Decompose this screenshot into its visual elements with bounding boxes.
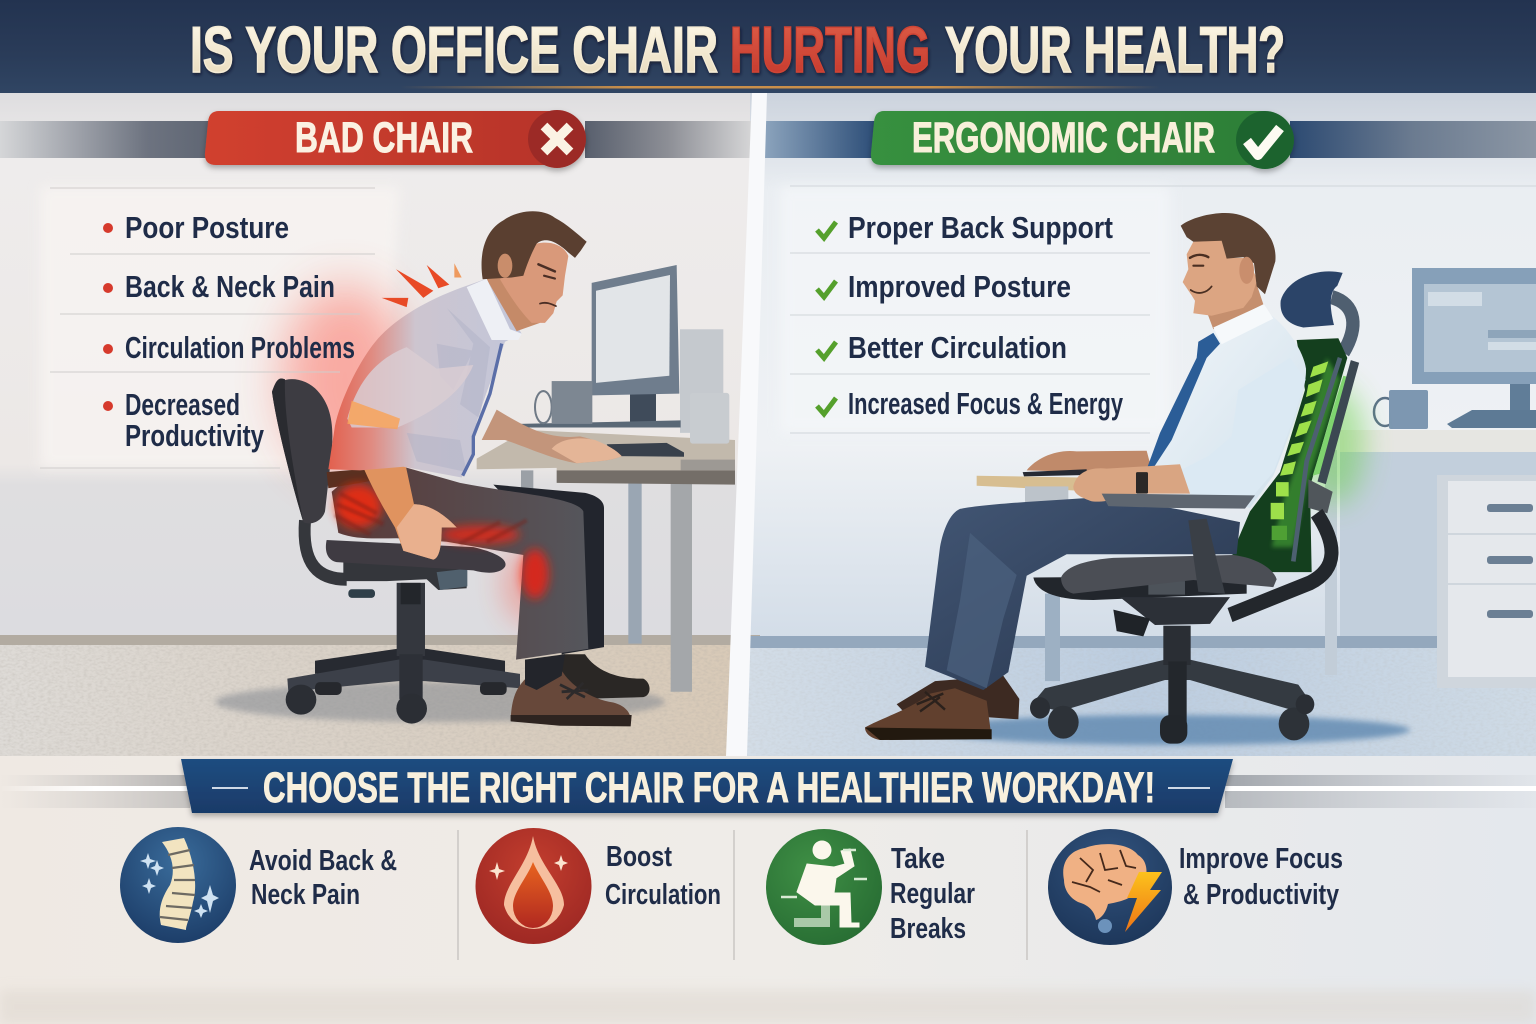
man: near leg and hips	[332, 467, 588, 660]
mug behind monitor	[535, 381, 592, 424]
icon: check mark	[1236, 111, 1294, 169]
pain marks at upper back	[382, 263, 462, 307]
tip: avoid back and neck pain	[120, 827, 397, 943]
item: increased focus and energy: Increased Focus & Energy	[848, 386, 1124, 421]
armrest post	[1188, 519, 1225, 594]
left list backing panel	[40, 186, 400, 468]
banner text: CHOOSE THE RIGHT CHAIR FOR A HEALTHIER WORKDAY!	[263, 764, 1155, 812]
armrest pad	[1102, 494, 1255, 509]
man: hair	[1181, 213, 1276, 294]
man: far arm	[1027, 451, 1153, 476]
item: decreased productivity	[103, 387, 265, 453]
desk top	[977, 476, 1080, 502]
scene: sitting badly at desk	[272, 211, 735, 726]
man: trouser shadow folds	[947, 533, 1017, 688]
tip text: Circulation	[605, 879, 721, 911]
item: better circulation: Better Circulation	[848, 330, 1067, 365]
icon: spine	[120, 827, 236, 943]
badge label: BAD CHAIR	[295, 114, 473, 162]
wristwatch	[1136, 472, 1148, 494]
ergonomic backrest with lumbar glow	[1232, 338, 1355, 572]
man: shirt placket	[463, 344, 502, 476]
man: ear	[1239, 257, 1254, 284]
divider between the panels	[726, 93, 767, 756]
sleeve cuff glow	[347, 401, 400, 429]
pain glow: hips and legs	[335, 484, 549, 599]
man: shirt	[328, 279, 522, 477]
left baseboard and carpet floor	[0, 635, 760, 756]
belt	[327, 469, 370, 488]
tip text: Regular	[890, 878, 975, 910]
man: near shoe	[865, 688, 992, 740]
icon: brain and bolt	[1048, 829, 1172, 945]
man: near sleeve	[1177, 358, 1306, 495]
item: proper back support: Proper Back Support	[848, 210, 1113, 245]
tip text: Neck Pain	[251, 879, 360, 911]
pain glow behind back and hips	[283, 285, 558, 625]
man: necktie	[1147, 333, 1220, 472]
tip text: Breaks	[890, 913, 966, 945]
tip text: Take	[891, 843, 945, 875]
keyboard mouse on desk	[1023, 469, 1087, 476]
under-desk wall shade	[1340, 452, 1536, 636]
badge label: ERGONOMIC CHAIR	[912, 114, 1215, 162]
man: face	[500, 243, 568, 323]
man: trousers	[925, 496, 1240, 690]
right desk with drawers	[1325, 430, 1536, 688]
man: collar	[467, 279, 522, 340]
man: hair	[482, 211, 587, 279]
chair seat cushion	[1061, 555, 1277, 594]
green glow behind backrest	[1305, 385, 1365, 505]
right baseboard and carpet floor	[745, 636, 1536, 756]
man: pained expression	[538, 264, 556, 306]
bottom section background	[0, 756, 1536, 1024]
tip text: Improve Focus	[1179, 843, 1343, 875]
title bar	[0, 0, 1536, 93]
chair base and wheels	[1030, 626, 1314, 744]
icon: X mark	[528, 110, 586, 168]
man: shirt	[1147, 313, 1306, 508]
title text: last part: YOUR HEALTH?	[945, 13, 1285, 86]
item: back and neck pain: Back & Neck Pain	[125, 269, 335, 304]
man: shirt sleeve	[347, 347, 473, 427]
item: circulation problems: Circulation Problems	[125, 330, 355, 365]
man: forearm and near hand	[1073, 464, 1190, 502]
background: left office wall	[0, 93, 770, 638]
left header stripe	[0, 121, 752, 158]
tip text: Avoid Back &	[249, 845, 397, 877]
office chair base	[286, 583, 520, 724]
man: collar	[1213, 304, 1273, 344]
back box on desk	[680, 329, 723, 433]
man: far shoe	[562, 654, 650, 699]
man: far shoe	[897, 676, 1019, 719]
right mug	[1374, 390, 1428, 429]
background: right office wall	[750, 93, 1536, 638]
tip text: & Productivity	[1183, 879, 1339, 911]
man: ear	[498, 254, 512, 278]
right monitor	[1412, 268, 1536, 428]
tip text: Boost	[606, 841, 672, 873]
monitor	[520, 265, 681, 427]
icon: blood drop	[476, 828, 592, 944]
man: near hand and arm	[349, 426, 457, 560]
keyboard	[607, 443, 684, 457]
title text: highlighted word: HURTING	[730, 13, 930, 86]
item: decreased productivity: Decreased	[125, 387, 240, 422]
side stripes beside call-to-action	[0, 775, 1536, 808]
man: face	[1183, 240, 1257, 316]
call-to-action banner	[181, 759, 1233, 813]
chair back and seat	[272, 378, 506, 598]
chair frame arc	[1230, 513, 1332, 615]
right list backing panel	[780, 186, 1170, 433]
tip: improve focus and productivity	[1048, 829, 1343, 945]
item: decreased productivity: Productivity	[125, 418, 265, 453]
cup on desk	[690, 393, 729, 444]
scene: sitting in ergonomic chair	[865, 213, 1355, 744]
man: far arm and hand	[482, 410, 622, 463]
item: increased focus and energy	[817, 386, 1124, 421]
item: circulation problems	[103, 330, 355, 365]
item: poor posture: Poor Posture	[125, 210, 289, 245]
man: neck	[1207, 279, 1263, 329]
right header stripe	[764, 121, 1536, 158]
title text: first part: IS YOUR OFFICE CHAIR	[190, 13, 718, 86]
list: ergonomic chair benefits	[790, 186, 1536, 433]
desk leg behind	[1045, 594, 1060, 681]
item: improved posture: Improved Posture	[848, 269, 1071, 304]
icon: stretching figure	[766, 829, 882, 945]
badge: ergonomic chair	[871, 111, 1294, 169]
man: shirt folds	[407, 308, 490, 472]
tip: take regular breaks	[766, 829, 975, 945]
man: near shoe	[511, 654, 632, 726]
man: far leg	[493, 485, 604, 654]
tip: boost circulation	[476, 828, 721, 944]
seat mechanism	[1033, 576, 1247, 636]
desk	[477, 430, 735, 692]
man: smile and eye	[1190, 255, 1212, 293]
right office background	[1325, 268, 1536, 688]
list: bad chair effects	[40, 188, 375, 468]
man: neck	[487, 265, 540, 331]
headrest	[1281, 271, 1353, 352]
badge: bad chair	[205, 110, 586, 168]
